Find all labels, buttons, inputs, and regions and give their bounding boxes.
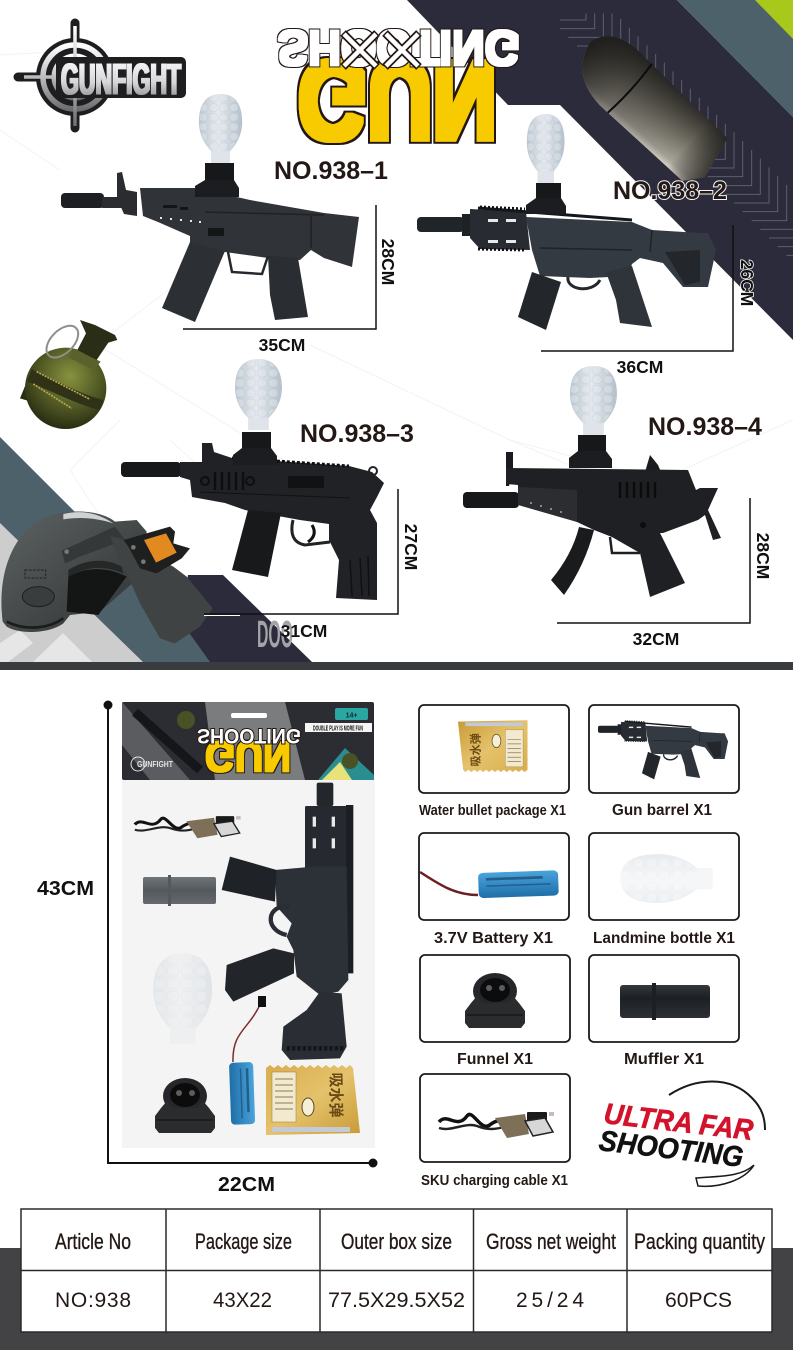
accessory: gun barrel [589,705,739,819]
accessory: charging cable [420,1074,570,1189]
product: gun 938-4 [463,366,721,597]
title: GUN: GUN [298,38,497,162]
bullet photo [563,23,737,191]
dimension 32CM and 28CM: 32CM [633,629,679,649]
dimension 31CM and 27CM [204,489,421,641]
helmet photo [1,512,213,643]
table values: 43X22 [213,1289,272,1312]
dimension 31CM and 27CM: 27CM [401,524,421,570]
divider band [0,662,793,670]
accessory: muffler [589,955,739,1068]
package panel [122,702,375,1148]
bottle 1 [199,94,242,163]
package dimensions: 22CM [218,1174,275,1196]
ultra far shooting badge: ULTRA FAR [602,1098,755,1147]
infographic canvas: DOO [257,614,293,656]
accessory: funnel [420,955,570,1068]
ultra far shooting badge: SHOOTING [597,1125,745,1174]
table values: 60PCS [665,1289,732,1312]
dimension 35CM and 28CM: 28CM [378,239,398,285]
dimension 35CM and 28CM [183,205,398,355]
label: NO.938-3: NO.938–3 [300,420,414,448]
accessory: battery: 3.7V Battery X1 [434,930,553,947]
title: SHOOTING: SHOOTING [278,20,520,74]
funnel mount 2 [526,183,566,214]
bottom-left triangles [0,437,312,662]
dimension 31CM and 27CM: 31CM [281,621,327,641]
table values: NO:938 [55,1289,131,1312]
gun body 1 [61,172,359,322]
package header banner: GUN [205,732,291,780]
specification table [21,1209,772,1332]
package dimensions [37,700,378,1196]
package header banner: SHOOTING [197,724,301,747]
accessory: water bullet package: Water bullet package X1 [419,802,566,819]
accessory: gun barrel: Gun barrel X1 [612,802,712,819]
label: NO.938-2: NO.938–2 [613,177,727,205]
funnel mount 4 [569,435,612,468]
accessory: funnel: Funnel X1 [457,1051,533,1068]
table headers: Article No [55,1229,131,1254]
gun body 3 [121,443,384,600]
product: gun 938-3 [121,359,384,600]
package battery [229,996,266,1125]
package header banner: GUNFIGHT [137,760,173,769]
funnel mount 3 [233,432,277,465]
bottle 2 [527,114,565,183]
package funnel [155,1078,215,1133]
product: gun 938-1 [61,94,359,322]
label: NO.938-4: NO.938–4 [648,413,762,441]
label: NO.938-1: NO.938–1 [274,157,388,185]
dimension 35CM and 28CM: 35CM [259,335,305,355]
package header banner: 14+ [346,712,357,720]
decorative chevron lines [560,13,793,255]
dimension 36CM and 26CM: 36CM [617,357,663,377]
gun body 2 [417,207,716,330]
dimension 32CM and 28CM: 28CM [753,533,773,579]
dimension 36CM and 26CM: 26CM [737,260,757,306]
package bottle [153,953,212,1043]
package water beads [266,1065,360,1135]
dimension 36CM and 26CM [541,225,757,377]
footer dark band [0,1248,793,1350]
table headers: Packing quantity [634,1229,765,1254]
accessory: battery [419,833,569,947]
title crosshair marks [343,33,419,67]
package dimensions: 43CM [37,878,94,900]
table headers: Outer box size [341,1229,452,1254]
bottle 3 [235,359,282,430]
grenade photo [20,320,117,429]
table values: 77.5X29.5X52 [328,1289,465,1312]
table values [55,1289,732,1312]
accessory: landmine bottle [589,833,739,947]
accessory: charging cable: SKU charging cable X1 [421,1172,568,1189]
package muffler [143,875,216,906]
blister backing [122,778,375,1148]
dimension 32CM and 28CM [557,498,773,649]
header graphic: top-right angled bands [407,0,793,340]
accessory: muffler: Muffler X1 [624,1051,704,1068]
faint web lines [0,50,793,595]
ultra far shooting badge [597,1082,765,1186]
package header banner [122,702,374,780]
table headers: Gross net weight [486,1229,616,1254]
bottle 4 [570,366,617,435]
gun body 4 [463,452,721,597]
logo: gunfight: GUNFIGHT [61,55,181,104]
logo: gunfight [18,23,186,128]
funnel mount 1 [195,163,239,197]
table headers: Package size [195,1229,292,1254]
table headers [55,1229,765,1254]
product: gun 938-2 [417,114,716,330]
table values: 25/24 [516,1289,584,1312]
package cable [135,816,241,838]
accessory: water bullet package [419,705,569,819]
package gun [222,783,353,1060]
accessory: landmine bottle: Landmine bottle X1 [593,930,735,947]
package header banner: DOUBLE PLAY IS MORE FUN [313,726,363,732]
